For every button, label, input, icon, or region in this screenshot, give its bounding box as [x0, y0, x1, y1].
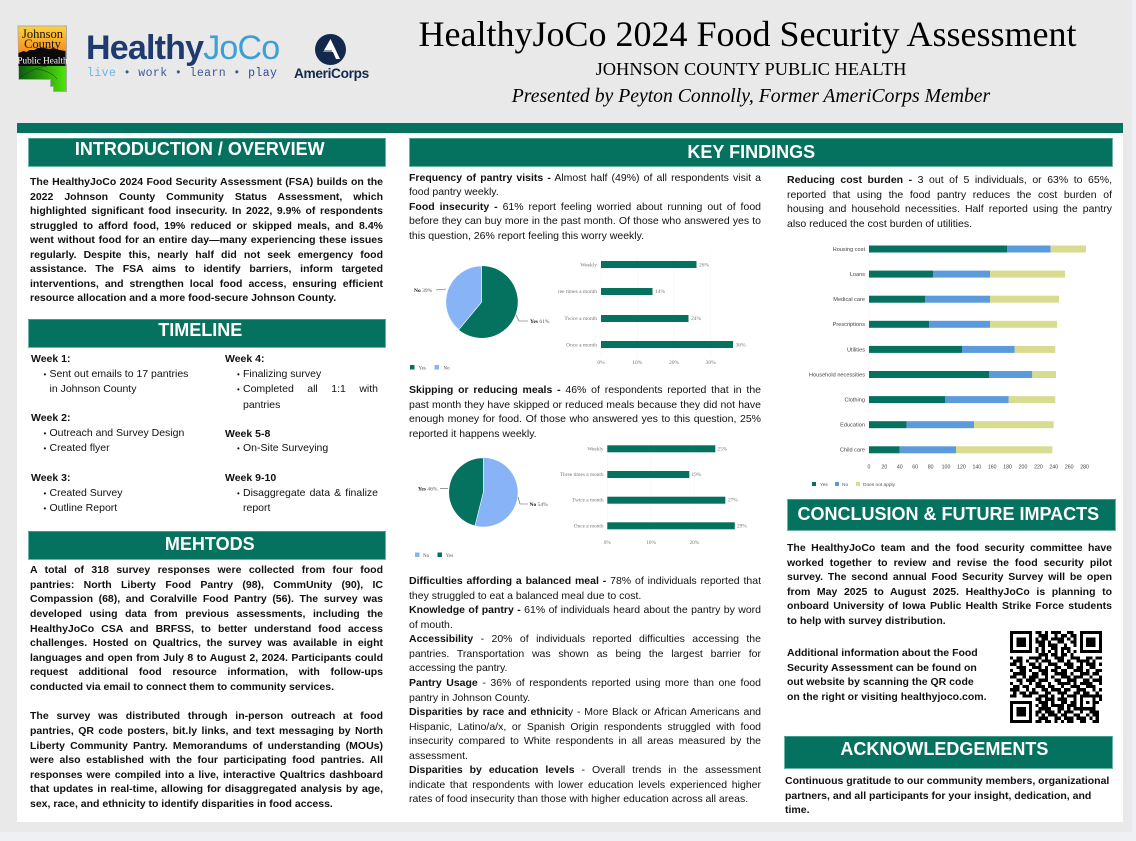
- text: additional findings: Pantry Usage - 36% of respondents reported using more than one food: [409, 677, 761, 689]
- text: conclusion: [787, 542, 1112, 627]
- text: introduction: resource allocation and a more food-secure Johnson County.: [30, 292, 336, 304]
- heading: introduction: INTRODUCTION / OVERVIEW: [75, 139, 325, 159]
- text: skipping or reducing meals: reported it happens weekly.: [409, 428, 537, 440]
- chart: skipping meals frequency bars: 19%: [692, 472, 702, 478]
- text: additional findings: [409, 575, 761, 805]
- logo: Johnson County Public Health: County: [24, 37, 62, 51]
- text: introduction: The HealthyJoCo 2024 Food Security Assessment (FSA) builds on the: [30, 176, 383, 188]
- text: additional findings: Knowledge of pantry - 61% of individuals heard about the pantry by word: [409, 604, 761, 616]
- chart: cost burden stacked bars: Prescriptions: [833, 322, 865, 328]
- timeline right column: Finalizing survey: [243, 368, 321, 380]
- text: methods: languages and open from July 8 to August 2, 2024. Participants could: [30, 652, 383, 664]
- main white panel: [17, 133, 1123, 822]
- chart: cost burden stacked bars: 280: [1080, 464, 1089, 470]
- chart: cost burden stacked bars: Clothing: [844, 398, 865, 404]
- timeline right column: •: [237, 385, 240, 394]
- chart: cost burden stacked bars: Education: [840, 422, 865, 428]
- text: additional findings: indicate that respondents with lower education levels experienced higher: [409, 779, 761, 791]
- chart: skipping meals pie: No 54%: [530, 502, 548, 508]
- text: introduction: struggled to afford food, 19% reduced or skipped meals, and 8.4%: [30, 220, 383, 232]
- timeline right column: On-Site Surveying: [243, 442, 328, 454]
- text: additional information: out website by scanning the QR code: [787, 676, 974, 688]
- chart: skipping meals frequency bars: 0%: [604, 540, 611, 546]
- chart: skipping meals pie: [415, 458, 548, 559]
- timeline left column: Week 3:: [31, 472, 70, 484]
- chart: food insecurity pie: No 39%: [414, 288, 433, 294]
- text: reducing cost burden: housing and household necessities. Half reported using the pantry: [787, 203, 1112, 215]
- text: conclusion: from May 2025 to August 2025. HealthyJoCo is planning to: [787, 586, 1112, 598]
- logo: Johnson County Public Health: Public Health: [17, 56, 68, 66]
- chart: cost burden stacked bars: 120: [957, 464, 966, 470]
- heading: timeline: TIMELINE: [158, 320, 242, 340]
- text: acknowledgements: [785, 775, 1109, 816]
- text: additional findings: insecurity compared to White respondents in all areas measured by the: [409, 735, 761, 747]
- text: pantry visits and food insecurity: this question, 26% report feeling this worry weekly.: [409, 230, 644, 242]
- text: acknowledgements: partners, and all participants for your insight, dedication, and: [785, 790, 1091, 802]
- text: additional findings: of mouth.: [409, 619, 453, 631]
- chart: skipping meals frequency bars: 10%: [646, 540, 656, 546]
- logo: Johnson County Public Health: Johnson: [22, 27, 64, 41]
- chart: cost burden stacked bars: Loans: [850, 272, 865, 278]
- chart: food insecurity frequency bars: 36%: [736, 342, 746, 348]
- text: additional findings: Difficulties affording a balanced meal - 78% of individuals reported that: [409, 575, 761, 587]
- chart: food insecurity pie: Yes 61%: [530, 319, 550, 325]
- timeline left column: •: [44, 489, 46, 498]
- text: introduction: went without food for an entire day—many experiencing these issues: [30, 234, 383, 246]
- text: conclusion: to help with survey distribution.: [787, 615, 946, 627]
- text: methods: challenges. Hosted on Qualtrics, the survey was available in eight: [30, 637, 383, 649]
- text: introduction: regularly. Despite this, nearly half did not seek emergency food: [30, 249, 383, 261]
- chart: food insecurity frequency bars: Weekly: [580, 262, 597, 268]
- chart: food insecurity frequency bars: 0%: [597, 360, 605, 366]
- timeline left column: Week 1:: [31, 353, 70, 365]
- chart: cost burden stacked bars: 200: [1019, 464, 1027, 470]
- chart: cost burden stacked bars: Child care: [840, 448, 865, 454]
- chart: food insecurity frequency bars: ree times a month: [558, 289, 597, 295]
- timeline left column: •: [44, 429, 46, 438]
- text: acknowledgements: time.: [785, 804, 810, 816]
- timeline left column: [31, 353, 188, 514]
- presenter line: Presented by Peyton Connolly, Former AmeriCorps Member: [512, 85, 990, 107]
- chart: skipping meals frequency bars: 29%: [737, 524, 747, 530]
- chart: food insecurity pie: Yes: [418, 366, 426, 372]
- text: conclusion: worked together to review and revise the food security pilot: [787, 557, 1112, 569]
- chart: cost burden stacked bars: 240: [1049, 464, 1058, 470]
- text: methods: responses were compiled into a live, interactive Qualtrics dashboard: [30, 769, 383, 781]
- chart: cost burden stacked bars: Yes: [820, 482, 828, 488]
- chart: cost burden stacked bars: 0: [868, 464, 871, 470]
- timeline left column: Created Survey: [50, 487, 122, 499]
- chart: skipping meals frequency bars: Twice a month: [572, 498, 604, 504]
- text: reducing cost burden: reported that using the food pantry reduces the cost burden of: [787, 189, 1112, 201]
- heading: conclusion: CONCLUSION & FUTURE IMPACTS: [798, 504, 1099, 524]
- timeline left column: in Johnson County: [50, 383, 136, 395]
- text: methods: that updates in real-time, allowing for disaggregated analysis by age,: [30, 783, 383, 795]
- text: reducing cost burden: [787, 174, 1112, 230]
- timeline right column: Disaggregate data & finalize: [243, 487, 378, 499]
- timeline right column: •: [237, 489, 240, 498]
- text: additional findings: pantries. Transportation was shown as being the largest barrier for: [409, 648, 761, 660]
- title: HealthyJoCo 2024 Food Security Assessment: [418, 14, 1076, 54]
- chart: cost burden stacked bars: 40: [897, 464, 903, 470]
- heading: conclusion: [787, 498, 1116, 531]
- text: methods: HealthyJoCo CSA and BRFSS, to better understand food access: [30, 622, 383, 634]
- text: additional findings: Disparities by race and ethnicity - More Black or African Americans and: [409, 706, 761, 718]
- timeline right column: report: [243, 502, 270, 514]
- chart: food insecurity frequency bars: 24%: [691, 316, 702, 322]
- text: skipping or reducing meals: [409, 384, 761, 440]
- text: additional findings: Disparities by education levels - Overall trends in the assessment: [409, 764, 761, 776]
- text: pantry visits and food insecurity: before they can buy more in the past month. Of those who answered yes to: [409, 215, 761, 227]
- timeline right column: [225, 353, 378, 514]
- heading: timeline: [28, 318, 386, 348]
- logo: AmeriCorps: AmeriCorps: [294, 66, 369, 81]
- text: introduction: assistance. The FSA aims to identify barriers, inform targeted: [30, 263, 383, 275]
- chart: food insecurity frequency bars: 14%: [655, 289, 666, 295]
- chart: cost burden stacked bars: 60: [912, 464, 918, 470]
- text: methods: were also established with the four participating food pantries. All: [30, 754, 383, 766]
- timeline left column: Created flyer: [50, 442, 110, 454]
- text: reducing cost burden: Reducing cost burden - 3 out of 5 individuals, or 63% to 65%,: [787, 174, 1112, 186]
- chart: food insecurity frequency bars: 20%: [669, 360, 679, 366]
- chart: skipping meals frequency bars: Weekly: [587, 446, 604, 452]
- chart: food insecurity frequency bars: 10%: [632, 360, 643, 366]
- chart: skipping meals pie: No: [423, 554, 430, 559]
- chart: cost burden stacked bars: 160: [988, 464, 997, 470]
- icon: QR code: [1010, 631, 1102, 723]
- timeline right column: Week 4:: [225, 353, 264, 365]
- chart: skipping meals frequency bars: Three times a month: [560, 472, 604, 478]
- text: methods: request additional food resource information, with follow-ups: [30, 666, 383, 678]
- chart: cost burden stacked bars: No: [842, 482, 848, 488]
- top teal band: [17, 123, 1123, 133]
- timeline right column: Completed all 1:1 with: [243, 383, 378, 395]
- chart: cost burden stacked bars: Does not apply: [863, 482, 896, 488]
- chart: food insecurity frequency bars: 30%: [706, 360, 716, 366]
- chart: food insecurity frequency bars: 26%: [699, 262, 710, 268]
- text: acknowledgements: Continuous gratitude to our community members, organizational: [785, 775, 1109, 787]
- chart: cost burden stacked bars: [809, 240, 1089, 488]
- text: methods: conducted via email to connect them to community services.: [30, 681, 334, 693]
- chart: food insecurity pie: No: [444, 366, 450, 372]
- text: pantry visits and food insecurity: food pantry weekly.: [409, 186, 499, 198]
- text: pantry visits and food insecurity: Food insecurity - 61% report feeling worried about running out of food: [409, 201, 761, 213]
- chart: cost burden stacked bars: 180: [1003, 464, 1012, 470]
- text: methods: pantries: North Liberty Food Pantry (98), CommUnity (90), IC: [30, 579, 383, 591]
- text: methods: Compassion (68), and Coralville Food Pantry (56). The survey was: [30, 593, 383, 605]
- chart: cost burden stacked bars: Utilities: [847, 348, 865, 354]
- timeline left column: •: [44, 444, 46, 453]
- chart: cost burden stacked bars: 80: [928, 464, 934, 470]
- chart: food insecurity pie: [410, 266, 550, 372]
- text: pantry visits and food insecurity: Frequency of pantry visits - Almost half (49%) of all respondents visit a: [409, 172, 761, 184]
- chart: cost burden stacked bars: Household necessities: [809, 372, 865, 378]
- text: additional information: Security Assessment can be found on: [787, 662, 977, 674]
- text: conclusion: onboard University of Iowa Public Health Strike Force students: [787, 600, 1112, 612]
- timeline right column: •: [237, 444, 240, 453]
- text: additional information: on the right or visiting healthyjoco.com.: [787, 691, 987, 703]
- text: introduction: interventions, and strengthen local food access, ensuring efficient: [30, 278, 383, 290]
- text: additional findings: Accessibility - 20% of individuals reported difficulties accessing the: [409, 633, 761, 645]
- chart: cost burden stacked bars: Housing cost: [833, 247, 865, 253]
- timeline left column: •: [44, 370, 46, 379]
- text: additional findings: accessing the pantry.: [409, 662, 507, 674]
- chart: cost burden stacked bars: 100: [942, 464, 950, 470]
- chart: skipping meals frequency bars: 20%: [689, 540, 700, 546]
- logo: HealthyJoCo: HealthyJoCo: [86, 29, 279, 67]
- subtitle: JOHNSON COUNTY PUBLIC HEALTH: [596, 59, 906, 79]
- chart: skipping meals frequency bars: 27%: [728, 498, 738, 504]
- chart: cost burden stacked bars: 260: [1065, 464, 1074, 470]
- text: conclusion: survey. The second annual Food Security Survey will be open: [787, 571, 1112, 583]
- text: methods: The survey was distributed through in-person outreach at food: [30, 710, 383, 722]
- logo: HealthyJoCo: live • work • learn • play: [87, 67, 277, 80]
- text: methods: pantries, QR code posters, bit.ly links, and text messaging by North: [30, 725, 383, 737]
- text: skipping or reducing meals: past month they have skipped or reduced meals because they did not have: [409, 399, 761, 411]
- timeline right column: pantries: [243, 399, 280, 411]
- chart: cost burden stacked bars: Medical care: [833, 297, 865, 303]
- chart: food insecurity frequency bars: Twice a month: [564, 316, 597, 322]
- timeline left column: Outline Report: [50, 502, 117, 514]
- text: pantry visits and food insecurity: [409, 172, 761, 242]
- text: skipping or reducing meals: enough money for food. Of those who answered yes to this question, 25%: [409, 413, 761, 425]
- chart: food insecurity frequency bars: Once a month: [566, 342, 597, 348]
- chart: food insecurity frequency bars: [558, 252, 746, 366]
- timeline right column: Week 5-8: [225, 428, 270, 440]
- timeline right column: •: [237, 370, 240, 379]
- text: methods: A total of 318 survey responses were collected from four food: [30, 564, 383, 576]
- timeline left column: Sent out emails to 17 pantries: [50, 368, 188, 380]
- logo: Johnson County Public Health: [17, 26, 68, 92]
- text: methods: developed using data from previous assessments, including the: [30, 608, 383, 620]
- text: reducing cost burden: also reduced the cost burden of utilities.: [787, 218, 972, 230]
- heading: methods: MEHTODS: [165, 534, 255, 554]
- heading: key findings: [409, 138, 1112, 167]
- chart: skipping meals pie: Yes: [446, 554, 453, 559]
- text: conclusion: The HealthyJoCo team and the food security committee have: [787, 542, 1112, 554]
- chart: skipping meals pie: Yes 46%: [418, 486, 438, 492]
- timeline left column: •: [44, 504, 46, 513]
- text: additional information: [787, 647, 987, 703]
- text: introduction: [30, 176, 383, 304]
- text: additional information: Additional information about the Food: [787, 647, 978, 659]
- chart: cost burden stacked bars: 220: [1034, 464, 1043, 470]
- heading: introduction: [28, 138, 386, 167]
- chart: skipping meals frequency bars: 25%: [718, 446, 728, 452]
- text: introduction: 2022 Johnson County Community Status Assessment, which: [30, 191, 383, 203]
- text: additional findings: assessment.: [409, 750, 468, 762]
- logo: AmeriCorps: [294, 34, 369, 81]
- chart: skipping meals frequency bars: [560, 440, 747, 546]
- text: additional findings: they struggled to eat a balanced meal due to cost.: [409, 590, 641, 602]
- heading: acknowledgements: ACKNOWLEDGEMENTS: [840, 739, 1048, 759]
- text: additional findings: pantry in Johnson County.: [409, 692, 530, 704]
- timeline right column: Week 9-10: [225, 472, 276, 484]
- text: methods: Liberty Community Pantry. Memorandums of understanding (MOUs): [30, 740, 383, 752]
- heading: acknowledgements: [784, 736, 1113, 768]
- heading: methods: [28, 531, 386, 560]
- chart: cost burden stacked bars: 140: [972, 464, 981, 470]
- text: introduction: highlighted significant food insecurity. In 2022, 9.9% of respondents: [30, 205, 383, 217]
- text: skipping or reducing meals: Skipping or reducing meals - 46% of respondents reported that in the: [409, 384, 761, 396]
- text: methods: sex, race, and ethnicity to identify disparities in food access.: [30, 798, 333, 810]
- heading: key findings: KEY FINDINGS: [687, 142, 815, 162]
- timeline left column: Outreach and Survey Design: [50, 427, 184, 439]
- timeline left column: Week 2:: [31, 412, 70, 424]
- text: additional findings: rates of food insecurity than those with higher education across all areas.: [409, 793, 748, 805]
- text: additional findings: Hispanic, Latino/a/x, or Spanish Origin respondents struggled with food: [409, 721, 761, 733]
- chart: skipping meals frequency bars: Once a month: [574, 524, 604, 530]
- chart: cost burden stacked bars: 20: [882, 464, 887, 470]
- text: methods: [30, 564, 383, 810]
